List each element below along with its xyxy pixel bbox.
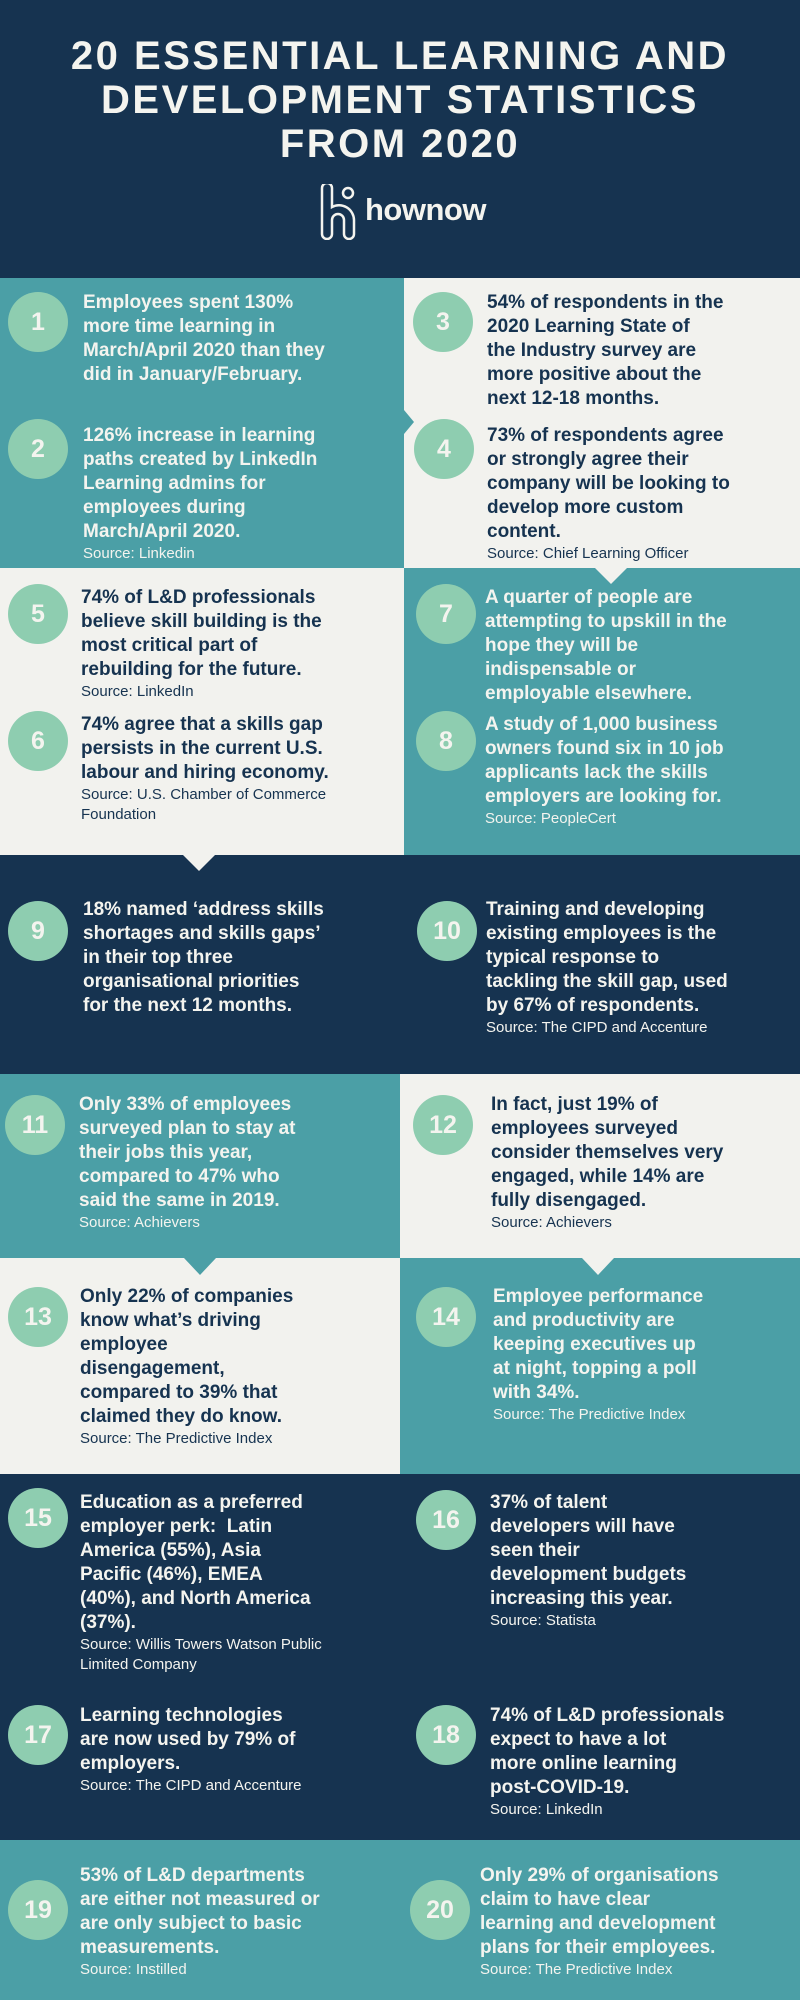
text: employee bbox=[80, 1334, 168, 1355]
text: Source: Willis Towers Watson Public bbox=[80, 1636, 322, 1653]
text: 14 bbox=[432, 1303, 460, 1331]
text: are only subject to basic bbox=[80, 1913, 302, 1934]
stat 11 bbox=[5, 1094, 296, 1231]
section: stats 9-10 bbox=[0, 855, 800, 1075]
text: typical response to bbox=[486, 947, 659, 968]
text: at night, topping a poll bbox=[493, 1358, 697, 1379]
text: 13 bbox=[24, 1303, 52, 1331]
text: next 12-18 months. bbox=[487, 388, 659, 409]
stat 8 bbox=[416, 711, 724, 827]
text: applicants lack the skills bbox=[485, 762, 708, 783]
stat 2 bbox=[8, 419, 317, 562]
text: Source: The Predictive Index bbox=[480, 1961, 672, 1978]
text: 7 bbox=[439, 600, 453, 628]
logo: hownow: hownow bbox=[365, 192, 486, 227]
stat 9 bbox=[8, 899, 324, 1016]
text: employees surveyed bbox=[491, 1118, 678, 1139]
stat 20 bbox=[410, 1865, 719, 1978]
text: expect to have a lot bbox=[490, 1729, 666, 1750]
text: and productivity are bbox=[493, 1310, 675, 1331]
title: DEVELOPMENT STATISTICS bbox=[101, 78, 699, 122]
text: Training and developing bbox=[486, 899, 705, 920]
text: Source: The Predictive Index bbox=[493, 1406, 685, 1423]
text: for the next 12 months. bbox=[83, 995, 292, 1016]
text: March/April 2020 than they bbox=[83, 340, 325, 361]
text: by 67% of respondents. bbox=[486, 995, 699, 1016]
text: learning and development bbox=[480, 1913, 715, 1934]
text: Pacific (46%), EMEA bbox=[80, 1564, 263, 1585]
text: existing employees is the bbox=[486, 923, 716, 944]
section: stats 1-4 bbox=[0, 278, 800, 568]
text: more online learning bbox=[490, 1753, 677, 1774]
text: 11 bbox=[22, 1111, 48, 1139]
text: Only 33% of employees bbox=[79, 1094, 291, 1115]
section: stats 11-12 bbox=[0, 1074, 800, 1258]
text: 2020 Learning State of bbox=[487, 316, 690, 337]
text: 73% of respondents agree bbox=[487, 425, 724, 446]
text: 8 bbox=[439, 727, 453, 755]
text: 10 bbox=[433, 917, 461, 945]
text: employers. bbox=[80, 1753, 180, 1774]
header bbox=[0, 0, 800, 278]
text: Source: The CIPD and Accenture bbox=[80, 1777, 302, 1794]
text: Source: LinkedIn bbox=[490, 1801, 603, 1818]
text: believe skill building is the bbox=[81, 611, 322, 632]
section: stats 19-20 bbox=[0, 1840, 800, 2000]
section: stats 15-18 bbox=[0, 1474, 800, 1840]
text: Foundation bbox=[81, 806, 156, 823]
text: Source: LinkedIn bbox=[81, 683, 194, 700]
text: A quarter of people are bbox=[485, 587, 692, 608]
text: Source: U.S. Chamber of Commerce bbox=[81, 786, 326, 803]
text: persists in the current U.S. bbox=[81, 738, 323, 759]
text: 12 bbox=[429, 1111, 457, 1139]
text: Source: The CIPD and Accenture bbox=[486, 1019, 708, 1036]
text: fully disengaged. bbox=[491, 1190, 646, 1211]
text: employers are looking for. bbox=[485, 786, 722, 807]
text: engaged, while 14% are bbox=[491, 1166, 704, 1187]
text: America (55%), Asia bbox=[80, 1540, 261, 1561]
stat 17 bbox=[8, 1705, 302, 1794]
text: post-COVID-19. bbox=[490, 1777, 629, 1798]
text: measurements. bbox=[80, 1937, 219, 1958]
text: 126% increase in learning bbox=[83, 425, 315, 446]
text: compared to 39% that bbox=[80, 1382, 277, 1403]
text: 5 bbox=[31, 600, 45, 628]
text: 74% agree that a skills gap bbox=[81, 714, 323, 735]
text: or strongly agree their bbox=[487, 449, 689, 470]
text: March/April 2020. bbox=[83, 521, 240, 542]
text: 17 bbox=[24, 1721, 52, 1749]
stat 3 bbox=[413, 292, 723, 409]
stat 13 bbox=[8, 1286, 293, 1447]
text: organisational priorities bbox=[83, 971, 299, 992]
text: 54% of respondents in the bbox=[487, 292, 723, 313]
text: Learning technologies bbox=[80, 1705, 283, 1726]
title: FROM 2020 bbox=[280, 122, 520, 166]
text: Source: Statista bbox=[490, 1612, 596, 1629]
text: indispensable or bbox=[485, 659, 636, 680]
text: consider themselves very bbox=[491, 1142, 723, 1163]
text: 4 bbox=[437, 435, 451, 463]
text: most critical part of bbox=[81, 635, 257, 656]
text: 1 bbox=[31, 308, 45, 336]
text: development budgets bbox=[490, 1564, 686, 1585]
text: Source: Chief Learning Officer bbox=[487, 545, 688, 562]
stat 5 bbox=[8, 584, 322, 700]
text: more time learning in bbox=[83, 316, 275, 337]
text: Source: PeopleCert bbox=[485, 810, 616, 827]
text: Source: Instilled bbox=[80, 1961, 187, 1978]
text: shortages and skills gaps’ bbox=[83, 923, 321, 944]
text: 18% named ‘address skills bbox=[83, 899, 324, 920]
text: are either not measured or bbox=[80, 1889, 320, 1910]
text: in their top three bbox=[83, 947, 233, 968]
text: Employee performance bbox=[493, 1286, 703, 1307]
text: (37%). bbox=[80, 1612, 136, 1633]
text: Limited Company bbox=[80, 1656, 197, 1673]
text: 18 bbox=[432, 1721, 460, 1749]
text: Education as a preferred bbox=[80, 1492, 303, 1513]
text: employer perk: Latin bbox=[80, 1516, 272, 1537]
text: develop more custom bbox=[487, 497, 683, 518]
text: owners found six in 10 job bbox=[485, 738, 724, 759]
text: 19 bbox=[24, 1896, 52, 1924]
stat 7 bbox=[416, 584, 727, 704]
text: company will be looking to bbox=[487, 473, 730, 494]
text: said the same in 2019. bbox=[79, 1190, 280, 1211]
text: paths created by LinkedIn bbox=[83, 449, 317, 470]
text: did in January/February. bbox=[83, 364, 302, 385]
stat 12 bbox=[413, 1094, 724, 1231]
text: Employees spent 130% bbox=[83, 292, 293, 313]
text: developers will have bbox=[490, 1516, 675, 1537]
text: increasing this year. bbox=[490, 1588, 673, 1609]
text: 15 bbox=[24, 1504, 52, 1532]
text: rebuilding for the future. bbox=[81, 659, 302, 680]
text: Only 29% of organisations bbox=[480, 1865, 719, 1886]
text: with 34%. bbox=[493, 1382, 580, 1403]
text: 3 bbox=[436, 308, 450, 336]
text: compared to 47% who bbox=[79, 1166, 280, 1187]
text: (40%), and North America bbox=[80, 1588, 311, 1609]
text: 53% of L&D departments bbox=[80, 1865, 305, 1886]
text: Learning admins for bbox=[83, 473, 266, 494]
text: A study of 1,000 business bbox=[485, 714, 718, 735]
text: 20 bbox=[426, 1896, 454, 1924]
stat 14 bbox=[416, 1286, 703, 1423]
text: 6 bbox=[31, 727, 45, 755]
text: Source: Linkedin bbox=[83, 545, 195, 562]
text: the Industry survey are bbox=[487, 340, 696, 361]
logo: hownow bbox=[320, 184, 486, 240]
section: stats 5-8 bbox=[0, 568, 800, 855]
text: 37% of talent bbox=[490, 1492, 607, 1513]
text: 9 bbox=[31, 917, 45, 945]
text: claim to have clear bbox=[480, 1889, 650, 1910]
text: disengagement, bbox=[80, 1358, 225, 1379]
text: keeping executives up bbox=[493, 1334, 696, 1355]
text: Only 22% of companies bbox=[80, 1286, 293, 1307]
text: tackling the skill gap, used bbox=[486, 971, 728, 992]
text: claimed they do know. bbox=[80, 1406, 282, 1427]
text: Source: Achievers bbox=[79, 1214, 200, 1231]
text: 74% of L&D professionals bbox=[81, 587, 315, 608]
text: know what’s driving bbox=[80, 1310, 261, 1331]
stat 6 bbox=[8, 711, 329, 823]
text: 2 bbox=[31, 435, 45, 463]
stat 4 bbox=[414, 419, 730, 562]
title: 20 ESSENTIAL LEARNING AND bbox=[71, 34, 729, 78]
text: employable elsewhere. bbox=[485, 683, 692, 704]
text: attempting to upskill in the bbox=[485, 611, 727, 632]
text: plans for their employees. bbox=[480, 1937, 715, 1958]
text: hope they will be bbox=[485, 635, 638, 656]
text: 74% of L&D professionals bbox=[490, 1705, 724, 1726]
stat 18 bbox=[416, 1705, 724, 1818]
text: surveyed plan to stay at bbox=[79, 1118, 295, 1139]
stat 15 bbox=[8, 1488, 322, 1673]
text: Source: The Predictive Index bbox=[80, 1430, 272, 1447]
text: employees during bbox=[83, 497, 246, 518]
text: seen their bbox=[490, 1540, 580, 1561]
title bbox=[71, 34, 729, 166]
text: are now used by 79% of bbox=[80, 1729, 295, 1750]
text: content. bbox=[487, 521, 561, 542]
section: stats 13-14 bbox=[0, 1258, 800, 1474]
text: 16 bbox=[432, 1506, 460, 1534]
text: Source: Achievers bbox=[491, 1214, 612, 1231]
stat 19 bbox=[8, 1865, 320, 1978]
stat 16 bbox=[416, 1490, 686, 1629]
stat 10 bbox=[417, 899, 728, 1036]
stat 1 bbox=[8, 292, 325, 385]
text: more positive about the bbox=[487, 364, 701, 385]
text: In fact, just 19% of bbox=[491, 1094, 658, 1115]
text: labour and hiring economy. bbox=[81, 762, 329, 783]
text: their jobs this year, bbox=[79, 1142, 252, 1163]
